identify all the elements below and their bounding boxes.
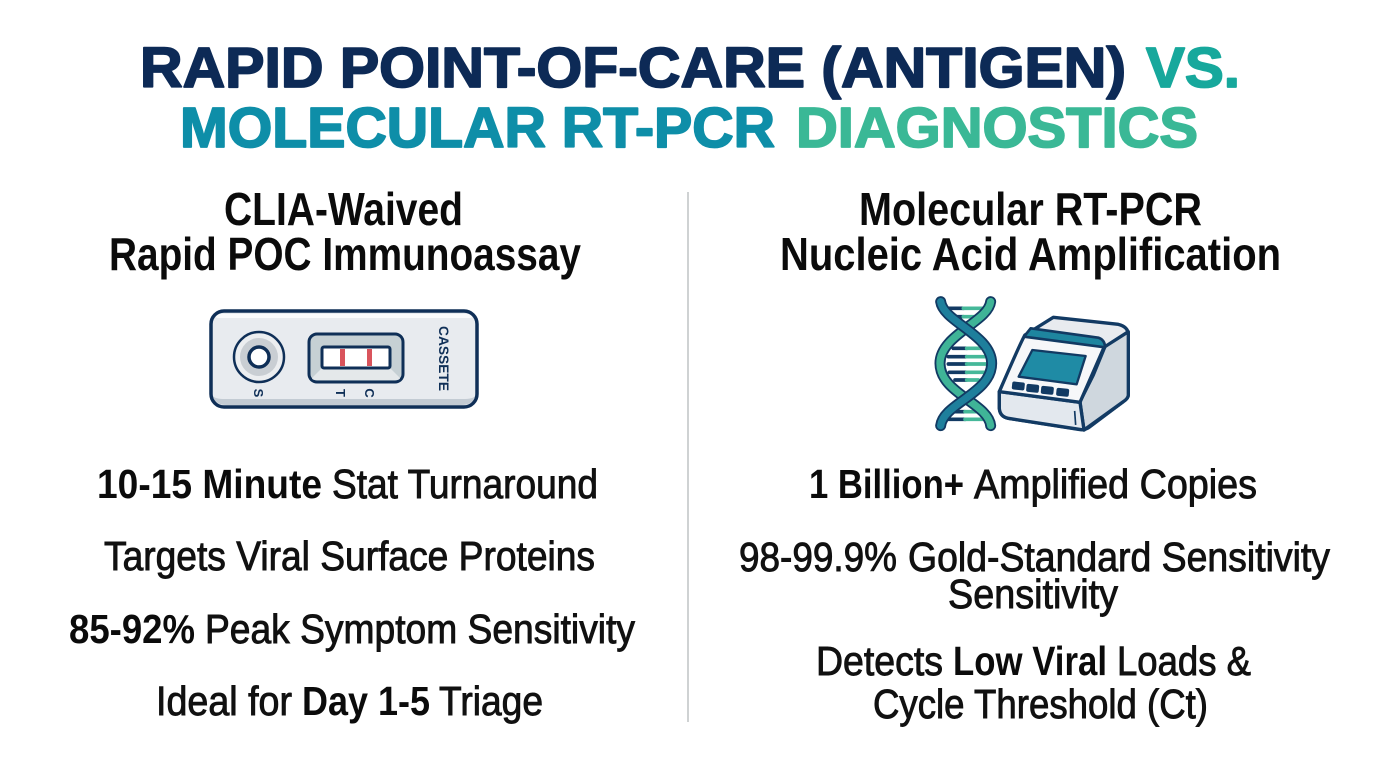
fact: ideal use: Ideal for <box>156 678 292 724</box>
title: MOLECULAR RT-PCR <box>180 96 775 160</box>
panel: rapid POC immunoassay <box>69 183 635 724</box>
fact: low viral loads <box>816 638 1251 727</box>
heading: molecular RT-PCR <box>780 183 1281 280</box>
heading: CLIA-waived: Rapid POC Immunoassay <box>109 228 581 280</box>
title: VS. <box>1146 36 1240 100</box>
fact: sensitivity: 85-92% <box>69 606 195 652</box>
fact: copies: 1 Billion+ <box>809 461 964 507</box>
fact: gold-standard sensitivity: Sensitivity <box>948 571 1118 617</box>
list: PCR facts <box>739 461 1330 727</box>
center divider <box>687 192 689 722</box>
fact: gold-standard sensitivity: Gold-Standard Sensitivity <box>908 534 1330 580</box>
icon: test cassette: CASSETE <box>436 326 452 391</box>
heading: CLIA-waived: CLIA-Waived <box>224 183 463 235</box>
fact: gold-standard sensitivity <box>739 534 1330 617</box>
heading: CLIA-waived <box>109 183 581 280</box>
fact: sensitivity: Peak Symptom Sensitivity <box>205 606 635 652</box>
fact: low viral loads: Low Viral <box>953 638 1107 684</box>
fact: low viral loads: Detects <box>816 638 943 684</box>
heading: molecular RT-PCR: Nucleic Acid Amplification <box>780 228 1281 280</box>
icon: test cassette: S <box>251 389 266 398</box>
fact: ideal use: Day 1-5 <box>302 678 430 724</box>
fact: turnaround: Stat Turnaround <box>332 461 598 507</box>
fact: turnaround: 10-15 Minute <box>97 461 322 507</box>
fact: ideal use <box>156 678 543 724</box>
fact: copies: Amplified Copies <box>974 461 1257 507</box>
icon: DNA helix <box>940 302 992 426</box>
fact: ideal use: Triage <box>439 678 543 724</box>
fact: low viral loads: Cycle Threshold (Ct) <box>873 681 1208 727</box>
icon: test cassette: T <box>333 389 348 397</box>
fact: gold-standard sensitivity: 98-99.9% <box>739 534 897 580</box>
title: RAPID POINT-OF-CARE (ANTIGEN) <box>140 36 1126 100</box>
icon: test cassette: C <box>362 388 377 398</box>
fact: targets: Targets Viral Surface Proteins <box>104 533 595 579</box>
title <box>140 36 1240 160</box>
icon: test cassette <box>211 311 477 407</box>
fact: low viral loads: Loads & <box>1117 638 1251 684</box>
list: rapid test facts <box>69 461 635 724</box>
icon: PCR machine <box>999 317 1128 430</box>
panel: molecular RT-PCR <box>739 183 1330 727</box>
fact: turnaround <box>97 461 598 507</box>
heading: molecular RT-PCR: Molecular RT-PCR <box>859 183 1202 235</box>
fact: copies <box>809 461 1257 507</box>
title: DIAGNOSTICS <box>796 96 1198 160</box>
